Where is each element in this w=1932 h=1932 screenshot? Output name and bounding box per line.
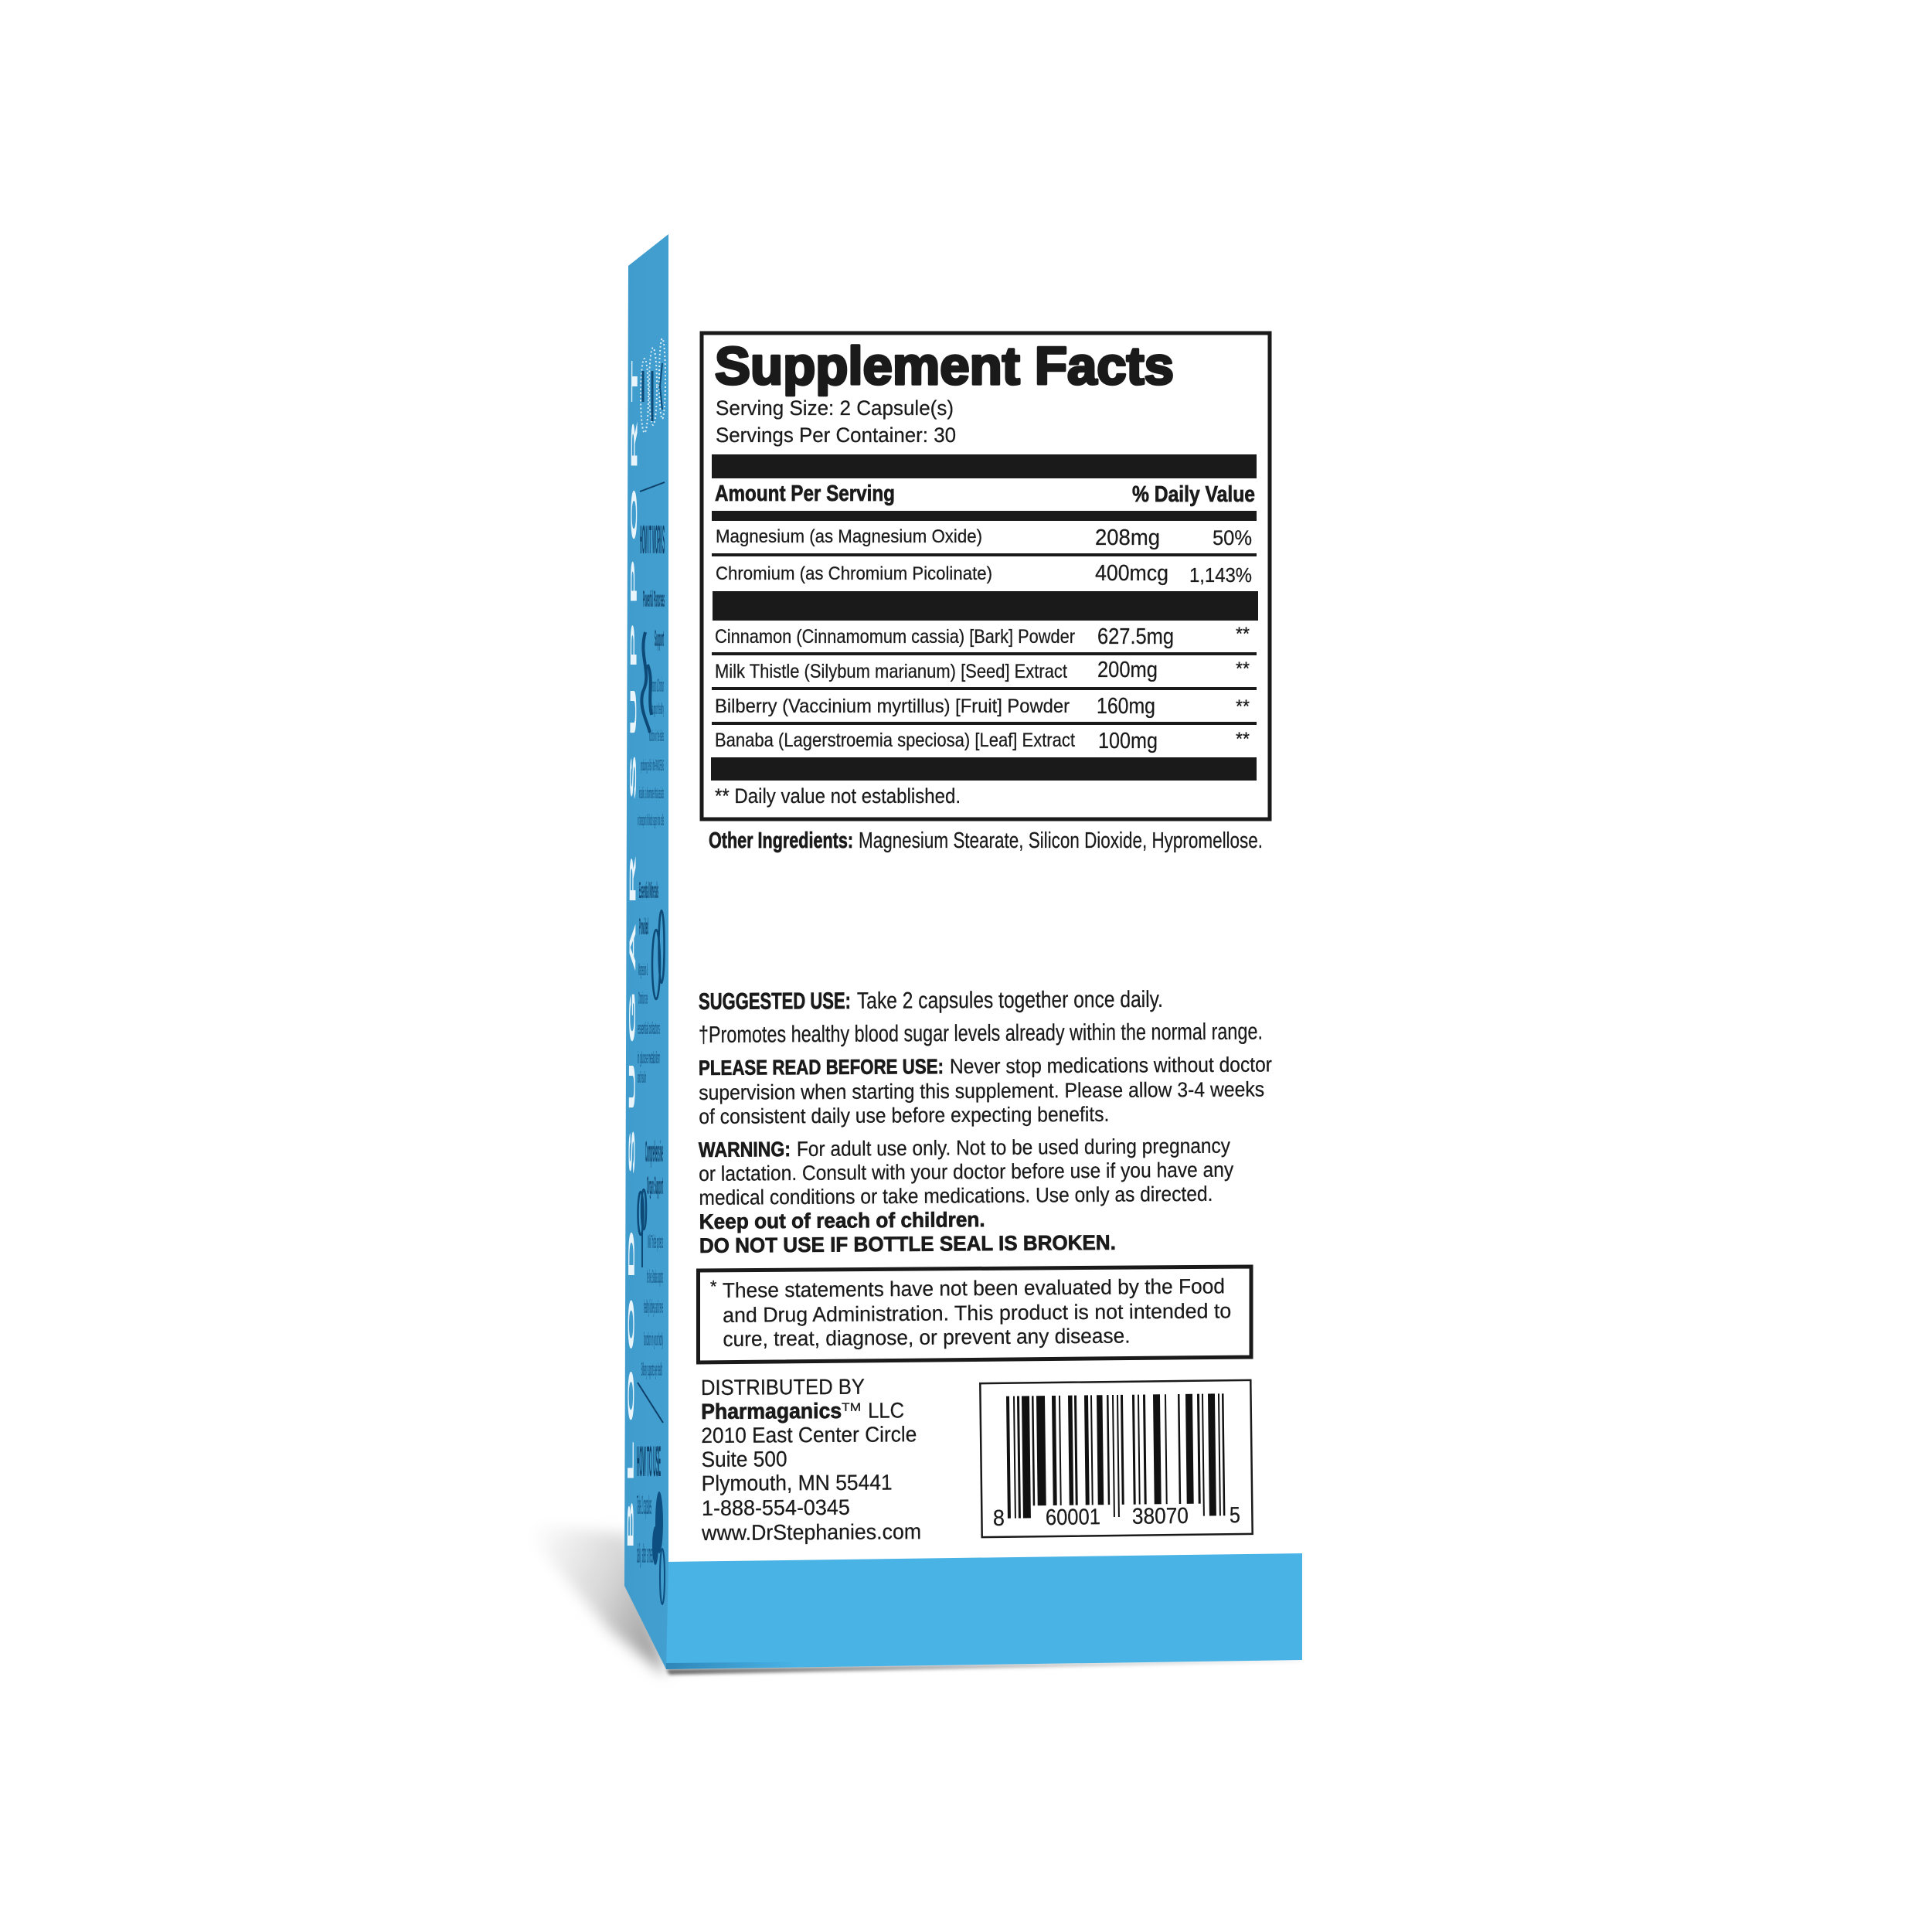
black bar 1 <box>712 454 1257 478</box>
side block: how to use text <box>637 1491 653 1569</box>
row: chromium: 400mcg <box>1095 561 1168 586</box>
warning: Keep out of reach of children. <box>699 1208 985 1233</box>
row: milk thistle <box>715 658 1250 682</box>
warning: For adult use only. Not to be used during pregnancy <box>797 1134 1230 1161</box>
barcode digits: 60001 <box>1046 1505 1100 1530</box>
please read before use <box>699 1053 1272 1128</box>
side title: blood sugar support: BLOOD SUGAR SUPPORT <box>625 360 639 1550</box>
text: support healthy <box>652 701 664 718</box>
suggested use: Take 2 capsules together once daily. <box>857 987 1163 1014</box>
distributor address: Suite 500 <box>701 1447 787 1471</box>
text: HOW IT WORKS <box>640 518 665 563</box>
warning: medical conditions or take medications. Use only as directed. <box>699 1182 1213 1209</box>
serving info: Servings Per Container: 30 <box>716 423 956 447</box>
barcode bars <box>1006 1393 1225 1519</box>
disclaimer text: These statements have not been evaluated by the Food <box>723 1274 1225 1302</box>
text: insulin, a hormone that assists <box>639 785 664 802</box>
text: Essential Minerals <box>639 878 658 903</box>
row: bilberry: ** <box>1236 696 1250 717</box>
row: banaba: Banaba (Lagerstroemia speciosa) [Leaf] Extract <box>715 730 1075 751</box>
row: milk thistle: 200mg <box>1097 658 1158 682</box>
text: Cinnamon & Chromium <box>651 675 664 696</box>
column headers: % Daily Value <box>1132 482 1255 507</box>
text: Organ Support <box>647 1172 663 1199</box>
footnote: ** Daily value not established. <box>715 784 961 808</box>
other ingredients: Magnesium Stearate, Silicon Dioxide, Hypromellose. <box>859 828 1263 853</box>
row: milk thistle: Milk Thistle (Silybum marianum) [Seed] Extract <box>715 661 1067 682</box>
serving info: Serving Size: 2 Capsule(s) <box>716 396 954 420</box>
text: HOW TO USE <box>637 1437 661 1485</box>
panel: supplement facts table <box>702 333 1270 819</box>
text: Chromium are <box>638 988 648 1008</box>
row: magnesium: Magnesium (as Magnesium Oxide) <box>716 526 982 547</box>
disclaimer text: cure, treat, diagnose, or prevent any disease. <box>723 1324 1131 1351</box>
text: Comprehensive <box>645 1136 663 1168</box>
barcode digits: 8 <box>993 1506 1005 1531</box>
side block: pancreas support <box>638 587 665 829</box>
row: bilberry: 160mg <box>1097 694 1155 719</box>
row: bilberry <box>715 694 1250 719</box>
text: Bilberry supports eye health <box>641 1359 662 1380</box>
other ingredients: Other Ingredients: <box>709 828 853 853</box>
text: daily, after a meal <box>637 1539 653 1569</box>
side block: essential minerals <box>638 878 660 1087</box>
serving info <box>716 396 956 447</box>
warning: or lactation. Consult with your doctor before use if you have any <box>699 1158 1234 1185</box>
disclaimer text: and Drug Administration. This product is not intended to <box>723 1299 1231 1327</box>
icon: minerals <box>652 910 665 999</box>
distributor address <box>700 1374 921 1545</box>
distributor address: 1-888-554-0345 <box>702 1495 850 1520</box>
text: in glucose metabolism <box>638 1048 660 1067</box>
row: magnesium: 208mg <box>1095 526 1160 550</box>
please read before use: of consistent daily use before expecting benefits. <box>699 1103 1109 1128</box>
distributor address: www.DrStephanies.com <box>701 1519 921 1545</box>
distributor address: TM <box>842 1401 861 1414</box>
text: essential cofactors <box>638 1019 660 1038</box>
barcode <box>980 1380 1253 1537</box>
barcode digits <box>993 1503 1240 1531</box>
distributor address: LLC <box>868 1398 904 1423</box>
text: in transport of blood sugar into cells <box>638 812 664 829</box>
box bottom edge shadow <box>666 1660 1302 1675</box>
row: bilberry: Bilberry (Vaccinium myrtillus) [Fruit] Powder <box>715 696 1070 717</box>
text: producing cells in the PANCREAS <box>641 757 664 774</box>
black bar 2 <box>712 511 1257 521</box>
row: chromium: Chromium (as Chromium Picolinate) <box>716 563 992 584</box>
black bar 4 <box>711 757 1257 781</box>
panel: box front blue band <box>666 1553 1302 1669</box>
side block: organ support <box>641 1136 663 1380</box>
distributor address: 2010 East Center Circle <box>701 1422 917 1447</box>
row: magnesium <box>716 526 1252 550</box>
text: function in the islets <box>649 728 664 745</box>
side divider <box>640 482 665 492</box>
text: Take 2 capsules <box>637 1491 651 1520</box>
column headers: Amount Per Serving <box>715 481 895 506</box>
blood sugar claim: †Promotes healthy blood sugar levels already within the normal range. <box>699 1019 1263 1048</box>
row: banaba: 100mg <box>1098 729 1158 753</box>
FDA disclaimer box <box>699 1267 1251 1362</box>
suggested use <box>699 987 1163 1015</box>
disclaimer text: * <box>710 1277 717 1296</box>
side divider <box>638 1383 663 1423</box>
barcode digits: 38070 <box>1132 1504 1189 1529</box>
warning: WARNING: <box>699 1138 791 1162</box>
text: the liver, Banaba supports <box>647 1267 663 1287</box>
please read before use: supervision when starting this supplement. Please allow 3-4 weeks <box>699 1078 1264 1104</box>
distributor address: DISTRIBUTED BY <box>701 1375 865 1400</box>
table border <box>702 333 1270 819</box>
row: magnesium: 50% <box>1213 526 1252 549</box>
warning: DO NOT USE IF BOTTLE SEAL IS BROKEN. <box>699 1231 1116 1257</box>
please read before use: PLEASE READ BEFORE USE: <box>699 1055 944 1080</box>
text: healthy kidneys and nerve <box>644 1297 663 1318</box>
distributor address: Pharmaganics <box>701 1399 842 1423</box>
row: cinnamon <box>715 624 1250 649</box>
barcode digits: 5 <box>1230 1503 1240 1528</box>
row: cinnamon: ** <box>1236 624 1250 645</box>
row: chromium <box>716 561 1252 587</box>
other ingredients <box>709 828 1263 853</box>
icon: three molecule circles <box>641 338 665 433</box>
row: milk thistle: ** <box>1236 658 1250 679</box>
text: and insulin <box>638 1070 646 1087</box>
icon: organ <box>638 1189 646 1267</box>
row: chromium: 1,143% <box>1189 563 1252 587</box>
text: Magnesium & <box>638 960 648 979</box>
row: banaba <box>715 729 1250 753</box>
panel: box side face <box>624 234 668 1669</box>
row: banaba: ** <box>1236 729 1250 750</box>
text: Provided <box>639 914 648 940</box>
table title: Supplement Facts <box>715 336 1174 396</box>
box cast shadow <box>518 1522 666 1675</box>
icon: capsules <box>652 1492 665 1604</box>
text: function in your body <box>644 1329 663 1350</box>
black bar 3 <box>713 591 1258 621</box>
text: Support <box>655 626 664 651</box>
icon: pancreas <box>641 632 651 733</box>
column headers <box>715 481 1255 507</box>
text: Milk Thistle protects <box>648 1232 663 1253</box>
distributor address: Plymouth, MN 55441 <box>702 1470 893 1495</box>
row: cinnamon: 627.5mg <box>1097 624 1174 649</box>
suggested use: SUGGESTED USE: <box>699 988 851 1015</box>
text: Powerful Pancreas <box>643 587 665 612</box>
disclaimer text <box>710 1272 1232 1351</box>
please read before use: Never stop medications without doctor <box>950 1053 1272 1078</box>
row: cinnamon: Cinnamon (Cinnamomum cassia) [Bark] Powder <box>715 626 1075 648</box>
warning <box>699 1134 1234 1257</box>
